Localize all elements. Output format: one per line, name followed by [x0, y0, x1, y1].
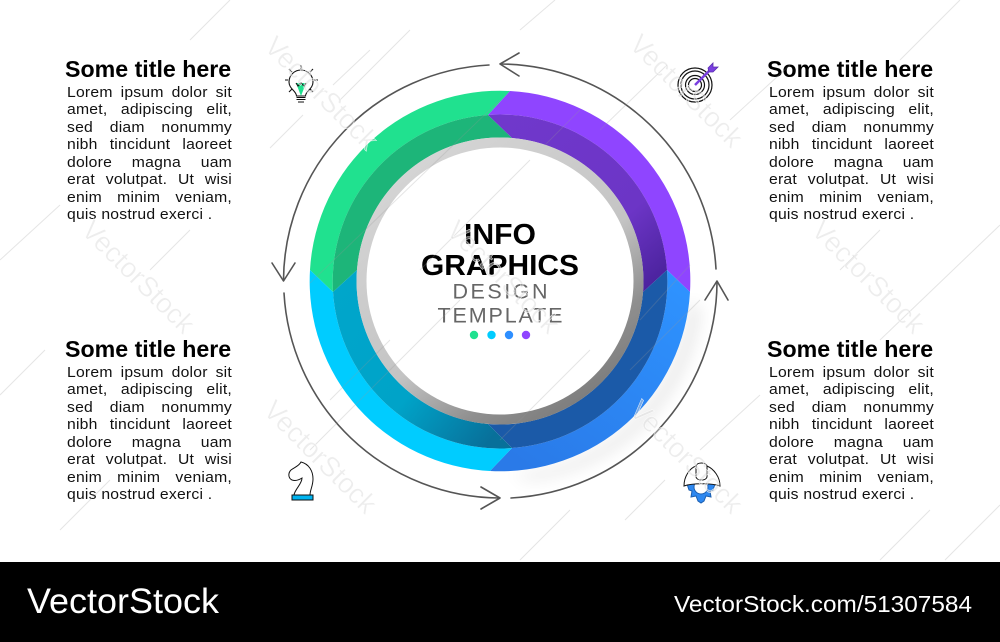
- arrow: left to bottom: [284, 293, 500, 509]
- watermark overlay: VectorStock: [624, 28, 750, 154]
- footer logo text: VectorStock: [27, 582, 220, 621]
- panel: top right text: dolore magna uam: [769, 155, 934, 171]
- panel: top right text: nibh tincidunt laoreet: [769, 137, 934, 153]
- inner ring and white disc: [356, 138, 644, 424]
- ring chart: [310, 91, 690, 471]
- panel: bottom left text: amet, adipiscing elit,: [67, 382, 232, 398]
- panel: top right text: enim minim veniam,: [769, 190, 934, 206]
- segment: purple: [488, 91, 690, 292]
- panel: top left text: sed diam nonummy: [67, 120, 232, 136]
- panel: bottom right text: [767, 336, 934, 503]
- panel: bottom left text: dolore magna uam: [67, 435, 232, 451]
- watermark overlay: VectorStock: [258, 394, 384, 520]
- watermark overlay: VectorStock: [259, 30, 385, 156]
- panel: top right text: [767, 56, 934, 223]
- watermark overlay: VectorStock: [806, 214, 932, 340]
- panel: bottom right text: erat volutpat. Ut wisi: [769, 452, 934, 468]
- panel: bottom right text: dolore magna uam: [769, 435, 934, 451]
- panel: top right text: sed diam nonummy: [769, 120, 934, 136]
- center title: [421, 219, 579, 328]
- arrow: top to left: [272, 65, 489, 281]
- panel: bottom right text: Lorem ipsum dolor sit: [769, 365, 934, 381]
- panel: bottom right text: amet, adipiscing elit,: [769, 382, 934, 398]
- icon: target with dart: [678, 63, 718, 102]
- panel: top left text: Lorem ipsum dolor sit: [67, 85, 232, 101]
- text: Some title here: [767, 336, 933, 362]
- panel: top right text: quis nostrud exerci .: [769, 207, 914, 223]
- icon: chess knight: [289, 462, 313, 500]
- panel: bottom right text: quis nostrud exerci .: [769, 487, 914, 503]
- arrow: right to top: [500, 53, 716, 269]
- footer bar: [0, 562, 1000, 642]
- icon: light bulb: [285, 65, 318, 102]
- footer image id: VectorStock.com/51307584: [674, 591, 972, 617]
- panel: top left text: quis nostrud exerci .: [67, 207, 212, 223]
- arrow: bottom to right: [511, 281, 728, 498]
- panel: bottom right text: nibh tincidunt laoreet: [769, 417, 934, 433]
- panel: top left text: [65, 56, 232, 223]
- panel: bottom left text: quis nostrud exerci .: [67, 487, 212, 503]
- panel: bottom left text: Lorem ipsum dolor sit: [67, 365, 232, 381]
- panel: bottom right text: enim minim veniam,: [769, 470, 934, 486]
- panel: top right text: amet, adipiscing elit,: [769, 102, 934, 118]
- icon: hard hat with gear: [684, 463, 720, 503]
- segment: green: [310, 91, 512, 292]
- panel: bottom right text: sed diam nonummy: [769, 400, 934, 416]
- panel: bottom left text: sed diam nonummy: [67, 400, 232, 416]
- panel: top left text: amet, adipiscing elit,: [67, 102, 232, 118]
- panel: top right text: Lorem ipsum dolor sit: [769, 85, 934, 101]
- panel: bottom left text: [65, 336, 232, 503]
- watermark overlay: VectorStock: [624, 394, 750, 520]
- center title: DESIGN: [452, 280, 548, 304]
- drop shadow of ring: [510, 300, 700, 480]
- panel: top left text: erat volutpat. Ut wisi: [67, 172, 232, 188]
- text: Some title here: [767, 56, 933, 82]
- center title: TEMPLATE: [438, 304, 562, 328]
- center dots: [470, 331, 530, 339]
- panel: bottom left text: enim minim veniam,: [67, 470, 232, 486]
- center title: GRAPHICS: [421, 250, 579, 282]
- text: Some title here: [65, 56, 231, 82]
- panel: bottom left text: erat volutpat. Ut wisi: [67, 452, 232, 468]
- panel: top left text: nibh tincidunt laoreet: [67, 137, 232, 153]
- panel: top left text: dolore magna uam: [67, 155, 232, 171]
- panel: top left text: enim minim veniam,: [67, 190, 232, 206]
- segment: cyan: [310, 270, 512, 471]
- panel: bottom left text: nibh tincidunt laoreet: [67, 417, 232, 433]
- watermark overlay: VectorStock: [441, 214, 567, 340]
- panel: top right text: erat volutpat. Ut wisi: [769, 172, 934, 188]
- segment: blue: [488, 270, 690, 471]
- watermark overlay: VectorStock: [76, 214, 202, 340]
- text: Some title here: [65, 336, 231, 362]
- center title: INFO: [464, 219, 536, 251]
